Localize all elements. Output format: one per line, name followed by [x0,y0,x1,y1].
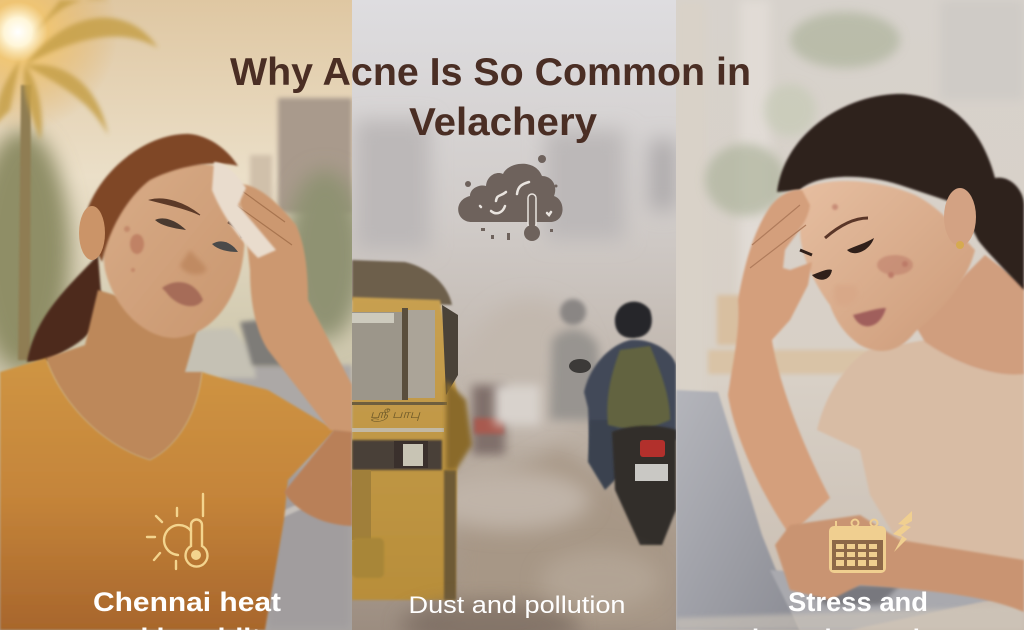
neck and chest [46,290,202,460]
ear and earring [944,188,976,249]
auto rickshaw: ஸ்ரீ பாபு [370,407,421,422]
background: shelf [708,295,868,374]
rider legs [586,421,616,491]
distant traffic [470,299,600,455]
background: parked cars [190,318,282,379]
label: stress and irregular routines: Stress and [788,587,928,617]
raised hand and arm [728,190,830,535]
neck [915,255,1024,375]
finger lines [236,188,292,245]
long hair [777,94,1024,290]
acne on cheek [124,226,144,272]
mirror [569,359,591,373]
eyes and brows [150,199,242,252]
woman with towel [0,134,352,630]
eyes and brows [800,218,874,280]
icon: cloud with pollution and thermometer [458,155,563,241]
backpack [607,346,670,432]
forearm and hand [236,184,352,435]
label: heat and humidity [93,587,281,630]
nose and mouth [162,250,206,306]
auto rickshaw [352,260,472,600]
ponytail [27,255,102,362]
ear [79,206,105,260]
background: plant [705,12,900,216]
sun glare [0,0,110,124]
title: Velachery [409,101,597,144]
shirt [817,340,1024,565]
lower forearm and typing hand [775,515,1024,612]
road dust [466,449,668,622]
towel [212,162,276,258]
panel: heat and humidity [0,0,365,630]
helmet [615,302,652,338]
rider torso and arm [584,340,676,470]
hair [83,134,238,262]
motorcycle [612,426,676,545]
palm tree [0,0,158,360]
background: city street [0,98,365,630]
license plate [635,464,668,481]
icon: sun and thermometer [147,494,208,569]
title [230,51,751,144]
panel: dust and pollution [352,0,676,630]
panel: stress and irregular routines [676,0,1024,630]
laptop [676,390,1024,630]
windshield [352,312,402,400]
foreground dust [400,601,580,630]
tail light [640,440,665,457]
hazy buildings [355,120,676,250]
icon: calendar and lightning bolt [829,511,912,573]
label: stress and irregular routines [752,587,964,630]
bumper and headlight [352,428,444,432]
background: curtain and wall [741,4,1018,273]
motorcyclist [569,302,676,545]
lower body [352,470,371,540]
upper arm [284,430,352,526]
acne on cheek [832,204,913,278]
label: heat and humidity: Chennai heat [93,587,281,617]
sign strip [352,402,447,405]
finger lines [750,205,806,268]
face [800,181,975,351]
face [103,164,245,338]
title: Why Acne Is So Common in [230,51,751,94]
label: dust and pollution: Dust and pollution [408,592,626,619]
nose and lips [834,285,886,326]
shirt [0,358,335,630]
